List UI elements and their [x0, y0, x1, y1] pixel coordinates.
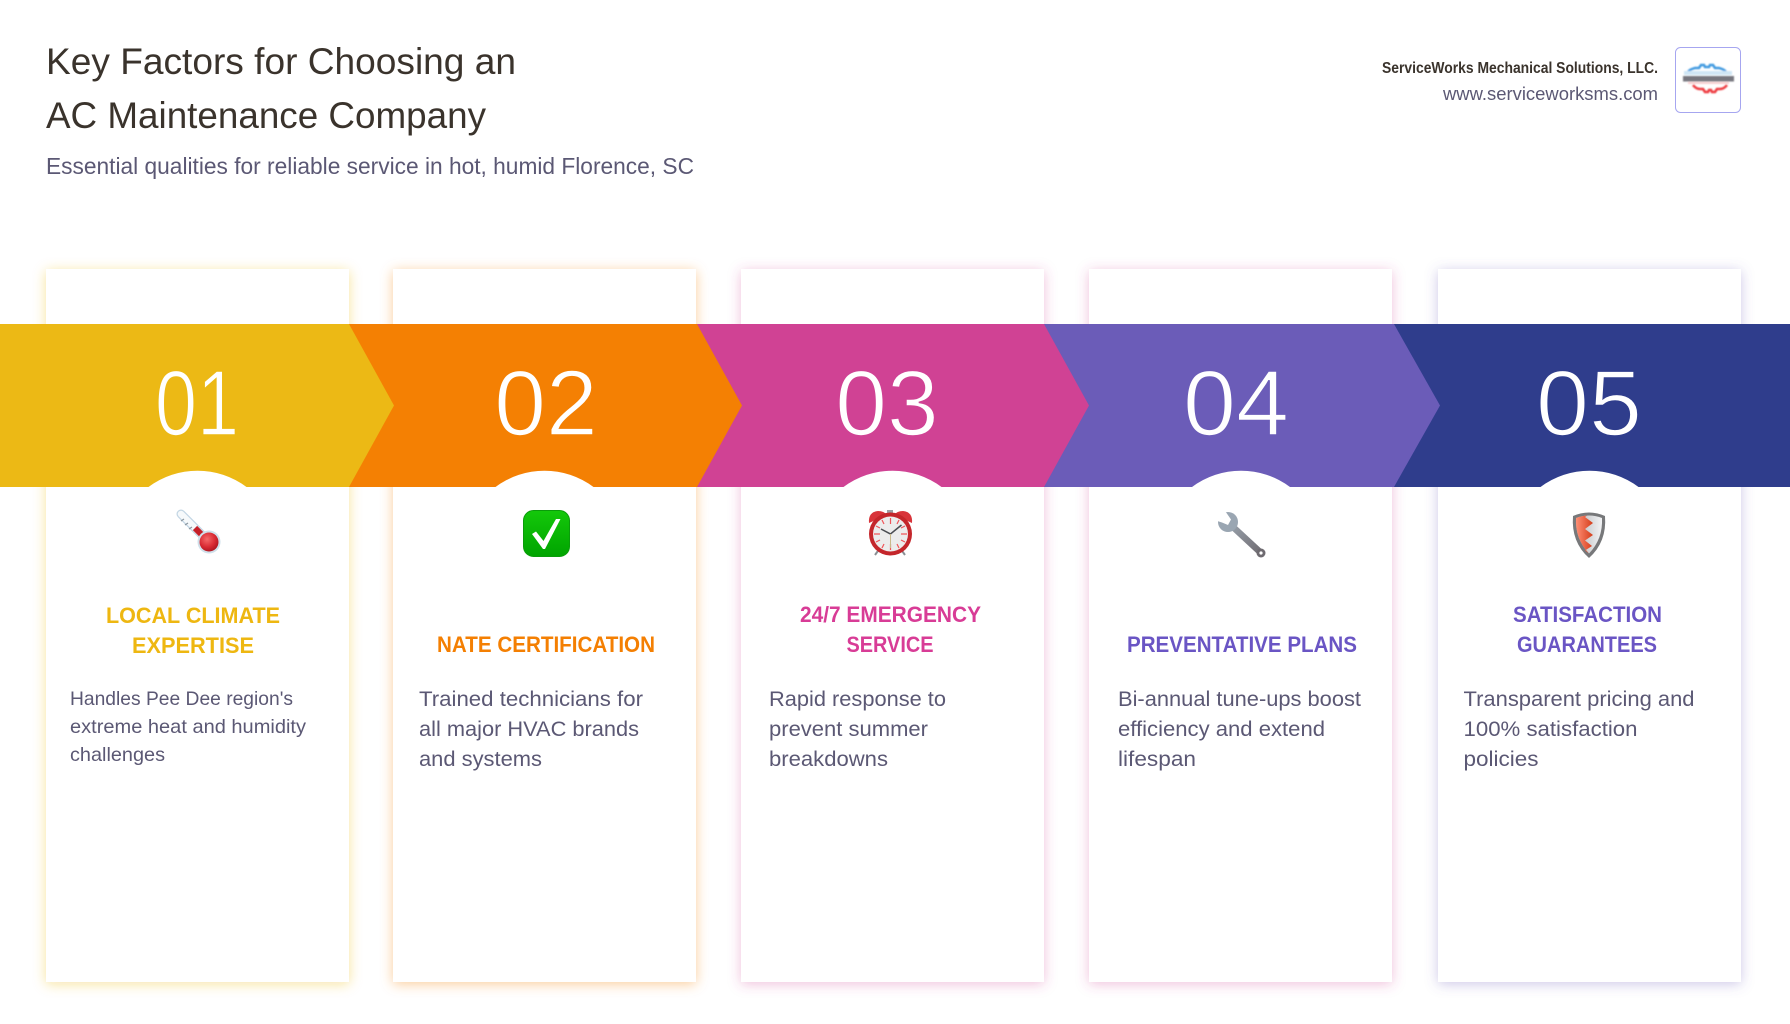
chevron 04: 04 — [1183, 351, 1289, 455]
card 01 heading: LOCAL CLIMATE — [106, 603, 280, 628]
chevron 02 — [345, 324, 742, 487]
card 04 description: lifespan — [1118, 747, 1196, 771]
panel: card 05 satisfaction guarantees — [1438, 269, 1741, 982]
chevron 05: 05 — [1536, 351, 1642, 455]
card 02 description — [419, 687, 643, 771]
card 05 description: Transparent pricing and — [1464, 687, 1694, 711]
card 05 description: 100% satisfaction — [1464, 717, 1638, 741]
card 01 description — [70, 688, 306, 766]
card 02 heading: NATE CERTIFICATION — [437, 632, 655, 657]
icon: thermometer — [181, 514, 220, 554]
card 02 description: Trained technicians for — [419, 687, 643, 711]
chevron 01 — [0, 324, 394, 487]
icon: check mark — [524, 510, 570, 556]
icon: alarm clock — [869, 510, 912, 556]
chevron 05 — [1390, 324, 1790, 487]
chevron 03 — [690, 324, 1089, 487]
chevron 02: 02 — [494, 351, 598, 455]
panel: card 04 preventative plans — [1089, 269, 1392, 982]
card 03 description — [769, 687, 946, 771]
company logo — [1676, 48, 1740, 112]
chevron band — [0, 324, 1790, 487]
panel: card 01 local climate expertise — [46, 269, 349, 982]
chevron 01: 01 — [155, 351, 239, 455]
title: Key Factors for Choosing an — [46, 41, 516, 82]
icon badge bumps — [148, 471, 1638, 487]
icon: shield — [1573, 512, 1605, 558]
card 03 heading: SERVICE — [846, 632, 934, 657]
card 05 heading: SATISFACTION — [1513, 602, 1662, 627]
card 03 description: prevent summer — [769, 717, 928, 741]
card 04 description — [1118, 687, 1361, 771]
subtitle: Essential qualities for reliable service in hot, humid Florence, SC — [46, 153, 694, 179]
card 01 heading — [106, 603, 280, 658]
icon: wrench — [1214, 508, 1266, 558]
card 04 heading: PREVENTATIVE PLANS — [1127, 632, 1357, 657]
card 05 heading: GUARANTEES — [1517, 632, 1657, 657]
card 05 heading — [1513, 602, 1662, 657]
company name: ServiceWorks Mechanical Solutions, LLC. — [1382, 60, 1658, 77]
card 01 heading: EXPERTISE — [132, 633, 254, 658]
card 01 description: extreme heat and humidity — [70, 716, 306, 738]
chevron 04 — [1040, 324, 1440, 487]
card 03 heading: 24/7 EMERGENCY — [800, 602, 981, 627]
panel: card 03 emergency service — [741, 269, 1044, 982]
chevron 03: 03 — [835, 351, 939, 455]
company website: www.serviceworksms.com — [1442, 83, 1658, 104]
card 05 description: policies — [1464, 747, 1538, 771]
card 04 description: efficiency and extend — [1118, 717, 1325, 741]
card 01 description: challenges — [70, 744, 165, 766]
card 03 description: Rapid response to — [769, 687, 946, 711]
card 02 description: all major HVAC brands — [419, 717, 639, 741]
title — [46, 41, 516, 136]
card 03 heading — [800, 602, 981, 657]
card 04 description: Bi-annual tune-ups boost — [1118, 687, 1361, 711]
card 03 description: breakdowns — [769, 747, 888, 771]
card 02 description: and systems — [419, 747, 542, 771]
card 05 description — [1464, 687, 1694, 771]
title: AC Maintenance Company — [46, 95, 486, 136]
card 01 description: Handles Pee Dee region's — [70, 688, 293, 710]
panel: card 02 NATE certification — [393, 269, 696, 982]
